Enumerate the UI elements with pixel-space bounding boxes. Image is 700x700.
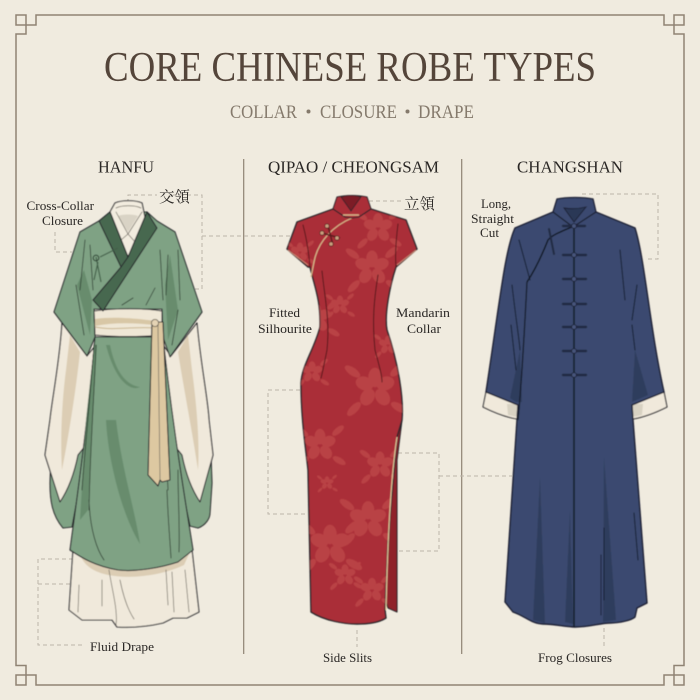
robe body and sleeves xyxy=(486,212,664,627)
label: li ling: 立領 xyxy=(404,195,436,213)
label: long straight cut: Straight xyxy=(471,211,514,226)
subtitle xyxy=(230,102,474,123)
label: fluid drape: Fluid Drape xyxy=(90,639,154,654)
frog buttons xyxy=(320,224,340,246)
subtitle: DRAPE xyxy=(418,102,474,123)
skirt shadow xyxy=(80,552,190,577)
sash ribbons xyxy=(148,322,170,486)
heading: hanfu: HANFU xyxy=(98,158,154,176)
placket xyxy=(311,218,352,277)
folds xyxy=(511,240,638,615)
right cuff xyxy=(632,392,667,419)
dress body xyxy=(287,209,417,624)
under skirt xyxy=(69,550,199,627)
inner sleeve right xyxy=(163,323,213,502)
center placket and closure xyxy=(527,226,574,627)
sash knot xyxy=(151,319,159,327)
changshan leader lines xyxy=(582,194,658,647)
label: long straight cut: Cut xyxy=(480,225,499,240)
lower sleeve left xyxy=(50,430,88,528)
label: mandarin collar xyxy=(396,305,451,336)
sleeve shadows xyxy=(510,350,648,624)
mandarin collar xyxy=(333,196,371,218)
illustration: qipao dress xyxy=(285,196,417,624)
dark green cross collar xyxy=(93,212,157,311)
label: long straight cut: Long, xyxy=(481,196,511,211)
column dividers xyxy=(244,159,462,654)
panel: hanfu xyxy=(26,158,290,654)
inner white collar xyxy=(110,201,146,257)
illustration: hanfu robe xyxy=(45,201,213,627)
label: mandarin collar: Mandarin xyxy=(396,305,451,320)
label: cross-collar closure: Cross-Collar xyxy=(26,198,95,213)
panel: changshan xyxy=(471,158,667,665)
heading: changshan: CHANGSHAN xyxy=(517,158,623,176)
subtitle: COLLAR xyxy=(230,102,297,123)
floral brocade pattern xyxy=(285,208,409,608)
left cuff xyxy=(483,392,518,419)
stand collar xyxy=(553,198,596,227)
label: jiao ling: 交領 xyxy=(159,188,191,206)
illustration: changshan robe xyxy=(483,198,667,627)
label: long straight cut xyxy=(471,196,514,240)
waist sash xyxy=(94,309,170,486)
frog closures xyxy=(549,226,586,375)
heading: qipao: QIPAO / CHEONGSAM xyxy=(268,158,439,176)
label: fitted silhouette xyxy=(258,305,312,336)
label: mandarin collar: Collar xyxy=(407,321,442,336)
label: fitted silhouette: Fitted xyxy=(269,305,301,320)
back slit panel xyxy=(385,420,402,612)
subtitle: CLOSURE xyxy=(320,102,397,123)
label: side slits: Side Slits xyxy=(323,650,372,665)
skirt xyxy=(70,337,193,571)
inner sleeve left xyxy=(45,323,96,502)
robe upper body xyxy=(54,212,202,357)
panel: qipao xyxy=(258,158,512,665)
sleeve trim xyxy=(288,250,416,265)
qipao leader lines xyxy=(268,201,512,647)
side seam xyxy=(518,282,527,420)
side slit edge xyxy=(386,437,397,610)
darts xyxy=(321,271,382,382)
label: fitted silhouette: Silhourite xyxy=(258,321,312,336)
lower sleeve right xyxy=(172,430,212,528)
label: cross-collar closure xyxy=(26,198,95,228)
label: frog closures: Frog Closures xyxy=(538,650,612,665)
tie closure xyxy=(94,248,118,282)
label: cross-collar closure: Closure xyxy=(42,213,83,228)
hanfu leader lines xyxy=(38,195,290,645)
title: CORE CHINESE ROBE TYPES xyxy=(104,45,596,91)
